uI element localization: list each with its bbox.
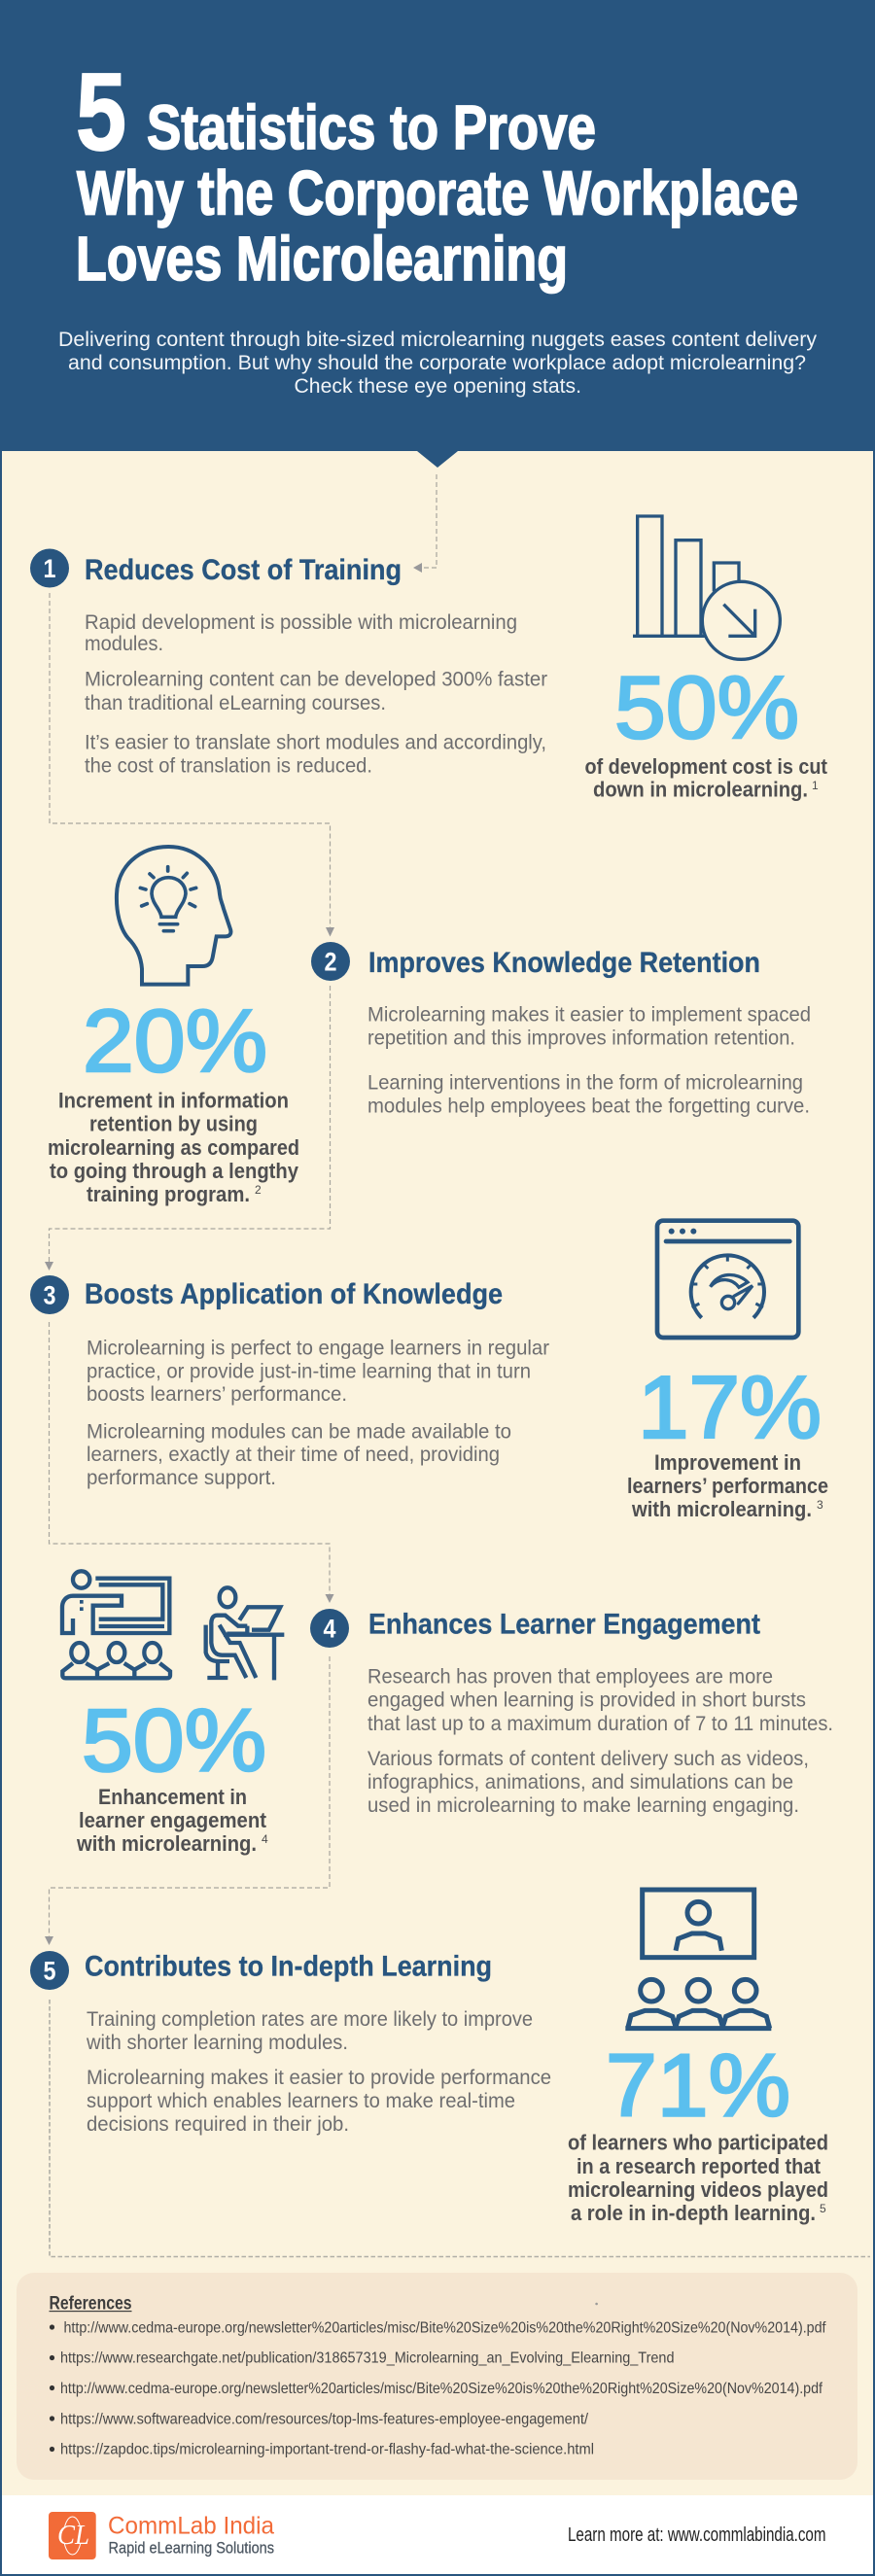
stat caption 3	[627, 1450, 828, 1521]
panel: step 2 improves knowledge retention	[48, 847, 811, 1206]
body text 3: learners, exactly at their time of need, providing	[87, 1444, 500, 1466]
stat caption 4: Enhancement in	[98, 1785, 247, 1809]
number badge 4: 4	[323, 1614, 336, 1643]
reference list: https://www.researchgate.net/publication/318657319_Microlearning_an_Evolving_Elearning_Trend	[60, 2350, 675, 2367]
heading 4: Enhances Learner Engagement	[368, 1608, 760, 1641]
intro text: and consumption. But why should the corporate workplace adopt microlearning?	[68, 352, 806, 374]
icon: head with lightbulb	[117, 847, 230, 985]
body text 5: support which enables learners to make real-time	[87, 2090, 515, 2112]
header pointer	[417, 451, 458, 468]
connector step 5 to references	[50, 2000, 870, 2257]
heading 3: Boosts Application of Knowledge	[85, 1278, 503, 1310]
stat caption 1: 1	[812, 779, 819, 792]
body text 3: practice, or provide just-in-time learning that in turn	[87, 1361, 531, 1382]
number badge 5	[30, 1951, 69, 1990]
stat caption 5: of learners who participated	[568, 2131, 828, 2154]
connector step 1 to 2	[50, 593, 334, 937]
title	[76, 51, 798, 294]
stat 71 percent: 71%	[606, 2037, 790, 2135]
body text 5	[86, 2008, 551, 2136]
body text 5: Microlearning makes it easier to provide performance	[87, 2067, 551, 2089]
intro text: Check these eye opening stats.	[294, 375, 581, 398]
body text 4: Research has proven that employees are more	[368, 1666, 773, 1688]
heading 5: Contributes to In-depth Learning	[85, 1950, 492, 1983]
body text 4: infographics, animations, and simulations can be	[368, 1771, 793, 1793]
body text 2: repetition and this improves information retention.	[368, 1027, 795, 1050]
body text 4: engaged when learning is provided in short bursts	[368, 1689, 806, 1711]
body text 1: Microlearning content can be developed 300% faster	[85, 669, 547, 690]
icon: falling bar chart	[633, 516, 780, 659]
title: Loves Microlearning	[76, 224, 568, 294]
stat caption 5: a role in in-depth learning.	[571, 2201, 816, 2225]
stat caption 1: down in microlearning.	[593, 778, 808, 801]
stat caption 3: 3	[817, 1498, 823, 1512]
stat caption 4: with microlearning.	[76, 1831, 257, 1856]
body text 1: the cost of translation is reduced.	[85, 754, 372, 778]
body text 4: Various formats of content delivery such as videos,	[368, 1748, 809, 1770]
icon: video presenter and audience	[625, 1890, 771, 2029]
body text 3: performance support.	[87, 1467, 276, 1489]
body text 3	[87, 1338, 549, 1489]
stat 50 percent: 50%	[614, 659, 799, 757]
stat caption 1	[585, 754, 828, 801]
panel: step 5 contributes to in-depth learning	[30, 1890, 828, 2225]
logo mark: CL	[57, 2520, 89, 2551]
company name: CommLab India	[108, 2512, 274, 2539]
reference list: https://zapdoc.tips/microlearning-important-trend-or-flashy-fad-what-the-science.html	[60, 2442, 594, 2458]
body text 1: modules.	[85, 633, 163, 655]
stat caption 2: 2	[255, 1183, 262, 1197]
number badge 4	[310, 1609, 349, 1648]
references heading: References	[49, 2294, 132, 2314]
heading 2: Improves Knowledge Retention	[368, 947, 760, 979]
stat caption 5: 5	[820, 2202, 826, 2215]
reference list	[50, 2319, 826, 2458]
panel: step 4 enhances learner engagement	[62, 1571, 833, 1856]
body text 2: Microlearning makes it easier to implement spaced	[368, 1003, 811, 1027]
stat caption 2: retention by using	[89, 1112, 258, 1135]
icon: browser window with gauge	[657, 1221, 798, 1338]
connector step 2 to 3	[45, 986, 331, 1271]
body text 4	[368, 1666, 833, 1817]
number badge 1	[30, 548, 69, 587]
stat caption 2: training program.	[87, 1182, 250, 1206]
number badge 3: 3	[43, 1281, 56, 1310]
stat caption 4: 4	[262, 1832, 268, 1846]
body text 5: decisions required in their job.	[87, 2113, 349, 2136]
company tagline: Rapid eLearning Solutions	[109, 2539, 274, 2557]
body text 5: Training completion rates are more likely to improve	[87, 2008, 533, 2031]
stat caption 4: learner engagement	[79, 1808, 267, 1832]
stat caption 2: microlearning as compared	[48, 1135, 299, 1160]
body text 4: that last up to a maximum duration of 7 to 11 minutes.	[368, 1713, 833, 1735]
header banner	[0, 0, 875, 451]
body text 3: boosts learners’ performance.	[87, 1383, 347, 1406]
panel: step 3 boosts application of knowledge	[30, 1221, 828, 1521]
body text 1	[85, 611, 547, 778]
stat caption 5: in a research reported that	[577, 2154, 822, 2178]
body text 3: Microlearning modules can be made available to	[87, 1421, 511, 1443]
reference list: https://www.softwareadvice.com/resources/top-lms-features-employee-engagement/	[60, 2411, 589, 2427]
stat caption 4	[76, 1785, 268, 1856]
stat 50 percent: 50%	[82, 1691, 266, 1791]
footer	[49, 2512, 826, 2559]
stat caption 2: Increment in information	[58, 1089, 289, 1112]
connector into step 1	[413, 474, 437, 573]
body text 2: Learning interventions in the form of microlearning	[368, 1071, 803, 1095]
panel: step 1 reduces cost of training	[30, 516, 828, 801]
intro text	[58, 329, 817, 398]
title: 5	[76, 51, 126, 173]
stat caption 2: to going through a lengthy	[50, 1159, 299, 1183]
connector step 4 to 5	[45, 1656, 330, 1945]
stat caption 3: learners’ performance	[627, 1474, 828, 1498]
stat 20 percent: 20%	[83, 992, 267, 1091]
logo mark	[49, 2512, 96, 2559]
stat caption 2	[48, 1089, 299, 1206]
stat caption 3: with microlearning.	[631, 1497, 812, 1521]
number badge 2: 2	[325, 947, 336, 976]
body text 2: modules help employees beat the forgetting curve.	[368, 1095, 810, 1118]
number badge 2	[311, 942, 350, 981]
panel: references	[17, 2273, 858, 2480]
stat caption 3: Improvement in	[654, 1450, 801, 1475]
heading 1: Reduces Cost of Training	[85, 554, 402, 586]
body text 1: Rapid development is possible with microlearning	[85, 611, 517, 634]
body text 2	[368, 1003, 811, 1118]
connector step 3 to 4	[49, 1322, 334, 1603]
stat 17 percent: 17%	[638, 1359, 822, 1457]
number badge 1: 1	[43, 554, 56, 583]
number badge 3	[30, 1275, 69, 1314]
body text 1: than traditional eLearning courses.	[85, 692, 386, 714]
stat caption 5	[568, 2131, 828, 2225]
body text 3: Microlearning is perfect to engage learners in regular	[87, 1338, 549, 1359]
title: Statistics to Prove	[147, 92, 596, 162]
body text 5: with shorter learning modules.	[86, 2032, 348, 2054]
stat caption 1: of development cost is cut	[585, 754, 828, 779]
intro text: Delivering content through bite-sized microlearning nuggets eases content delivery	[58, 329, 817, 351]
body text 4: used in microlearning to make learning engaging.	[368, 1794, 799, 1817]
stat caption 5: microlearning videos played	[568, 2177, 828, 2202]
number badge 5: 5	[43, 1956, 56, 1985]
body text 1: It’s easier to translate short modules and accordingly,	[85, 731, 546, 754]
icon: trainer and seated learner	[62, 1571, 284, 1680]
